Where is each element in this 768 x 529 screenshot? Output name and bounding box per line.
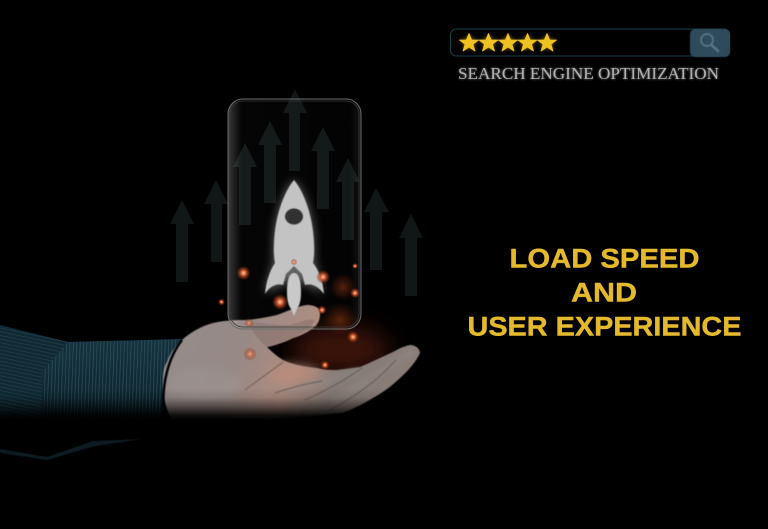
bottom fade to black bbox=[0, 388, 440, 420]
main title: AND bbox=[571, 278, 637, 308]
palm and fingers bbox=[163, 305, 420, 420]
search button bbox=[690, 29, 730, 57]
rocket flame bbox=[287, 273, 301, 316]
SEO caption: SEARCH ENGINE OPTIMIZATION bbox=[458, 64, 719, 83]
rocket body bbox=[265, 180, 324, 294]
search field bbox=[450, 29, 730, 56]
glass phone outline bbox=[228, 99, 361, 329]
finger creases bbox=[245, 360, 396, 410]
main title: USER EXPERIENCE bbox=[468, 311, 742, 341]
main title: LOAD SPEED bbox=[510, 244, 700, 274]
SEO caption: SEARCH ENGINE OPTIMIZATION bbox=[458, 64, 719, 83]
cuff shadow line bbox=[163, 340, 182, 416]
five star rating bbox=[460, 34, 556, 51]
rocket glow bbox=[265, 180, 323, 293]
hand with shirt sleeve bbox=[0, 305, 440, 444]
shirt lower hem bbox=[0, 439, 143, 460]
palm highlight bbox=[265, 364, 319, 382]
orange glow behind hand bbox=[290, 273, 390, 374]
thumb shading bbox=[247, 319, 315, 347]
rising arrows bbox=[170, 89, 423, 296]
rocket window bbox=[285, 208, 303, 224]
glowing sparks bbox=[218, 258, 360, 370]
search bar with rating bbox=[450, 29, 730, 57]
finger highlights bbox=[285, 352, 410, 400]
shirt cuff bbox=[42, 339, 182, 422]
main title bbox=[468, 244, 742, 341]
rocket bbox=[265, 180, 324, 316]
lower palm shadow bbox=[169, 367, 241, 403]
icon: magnifier bbox=[701, 34, 718, 51]
shirt upper sleeve bbox=[0, 325, 72, 432]
five star rating glow bbox=[460, 34, 556, 51]
